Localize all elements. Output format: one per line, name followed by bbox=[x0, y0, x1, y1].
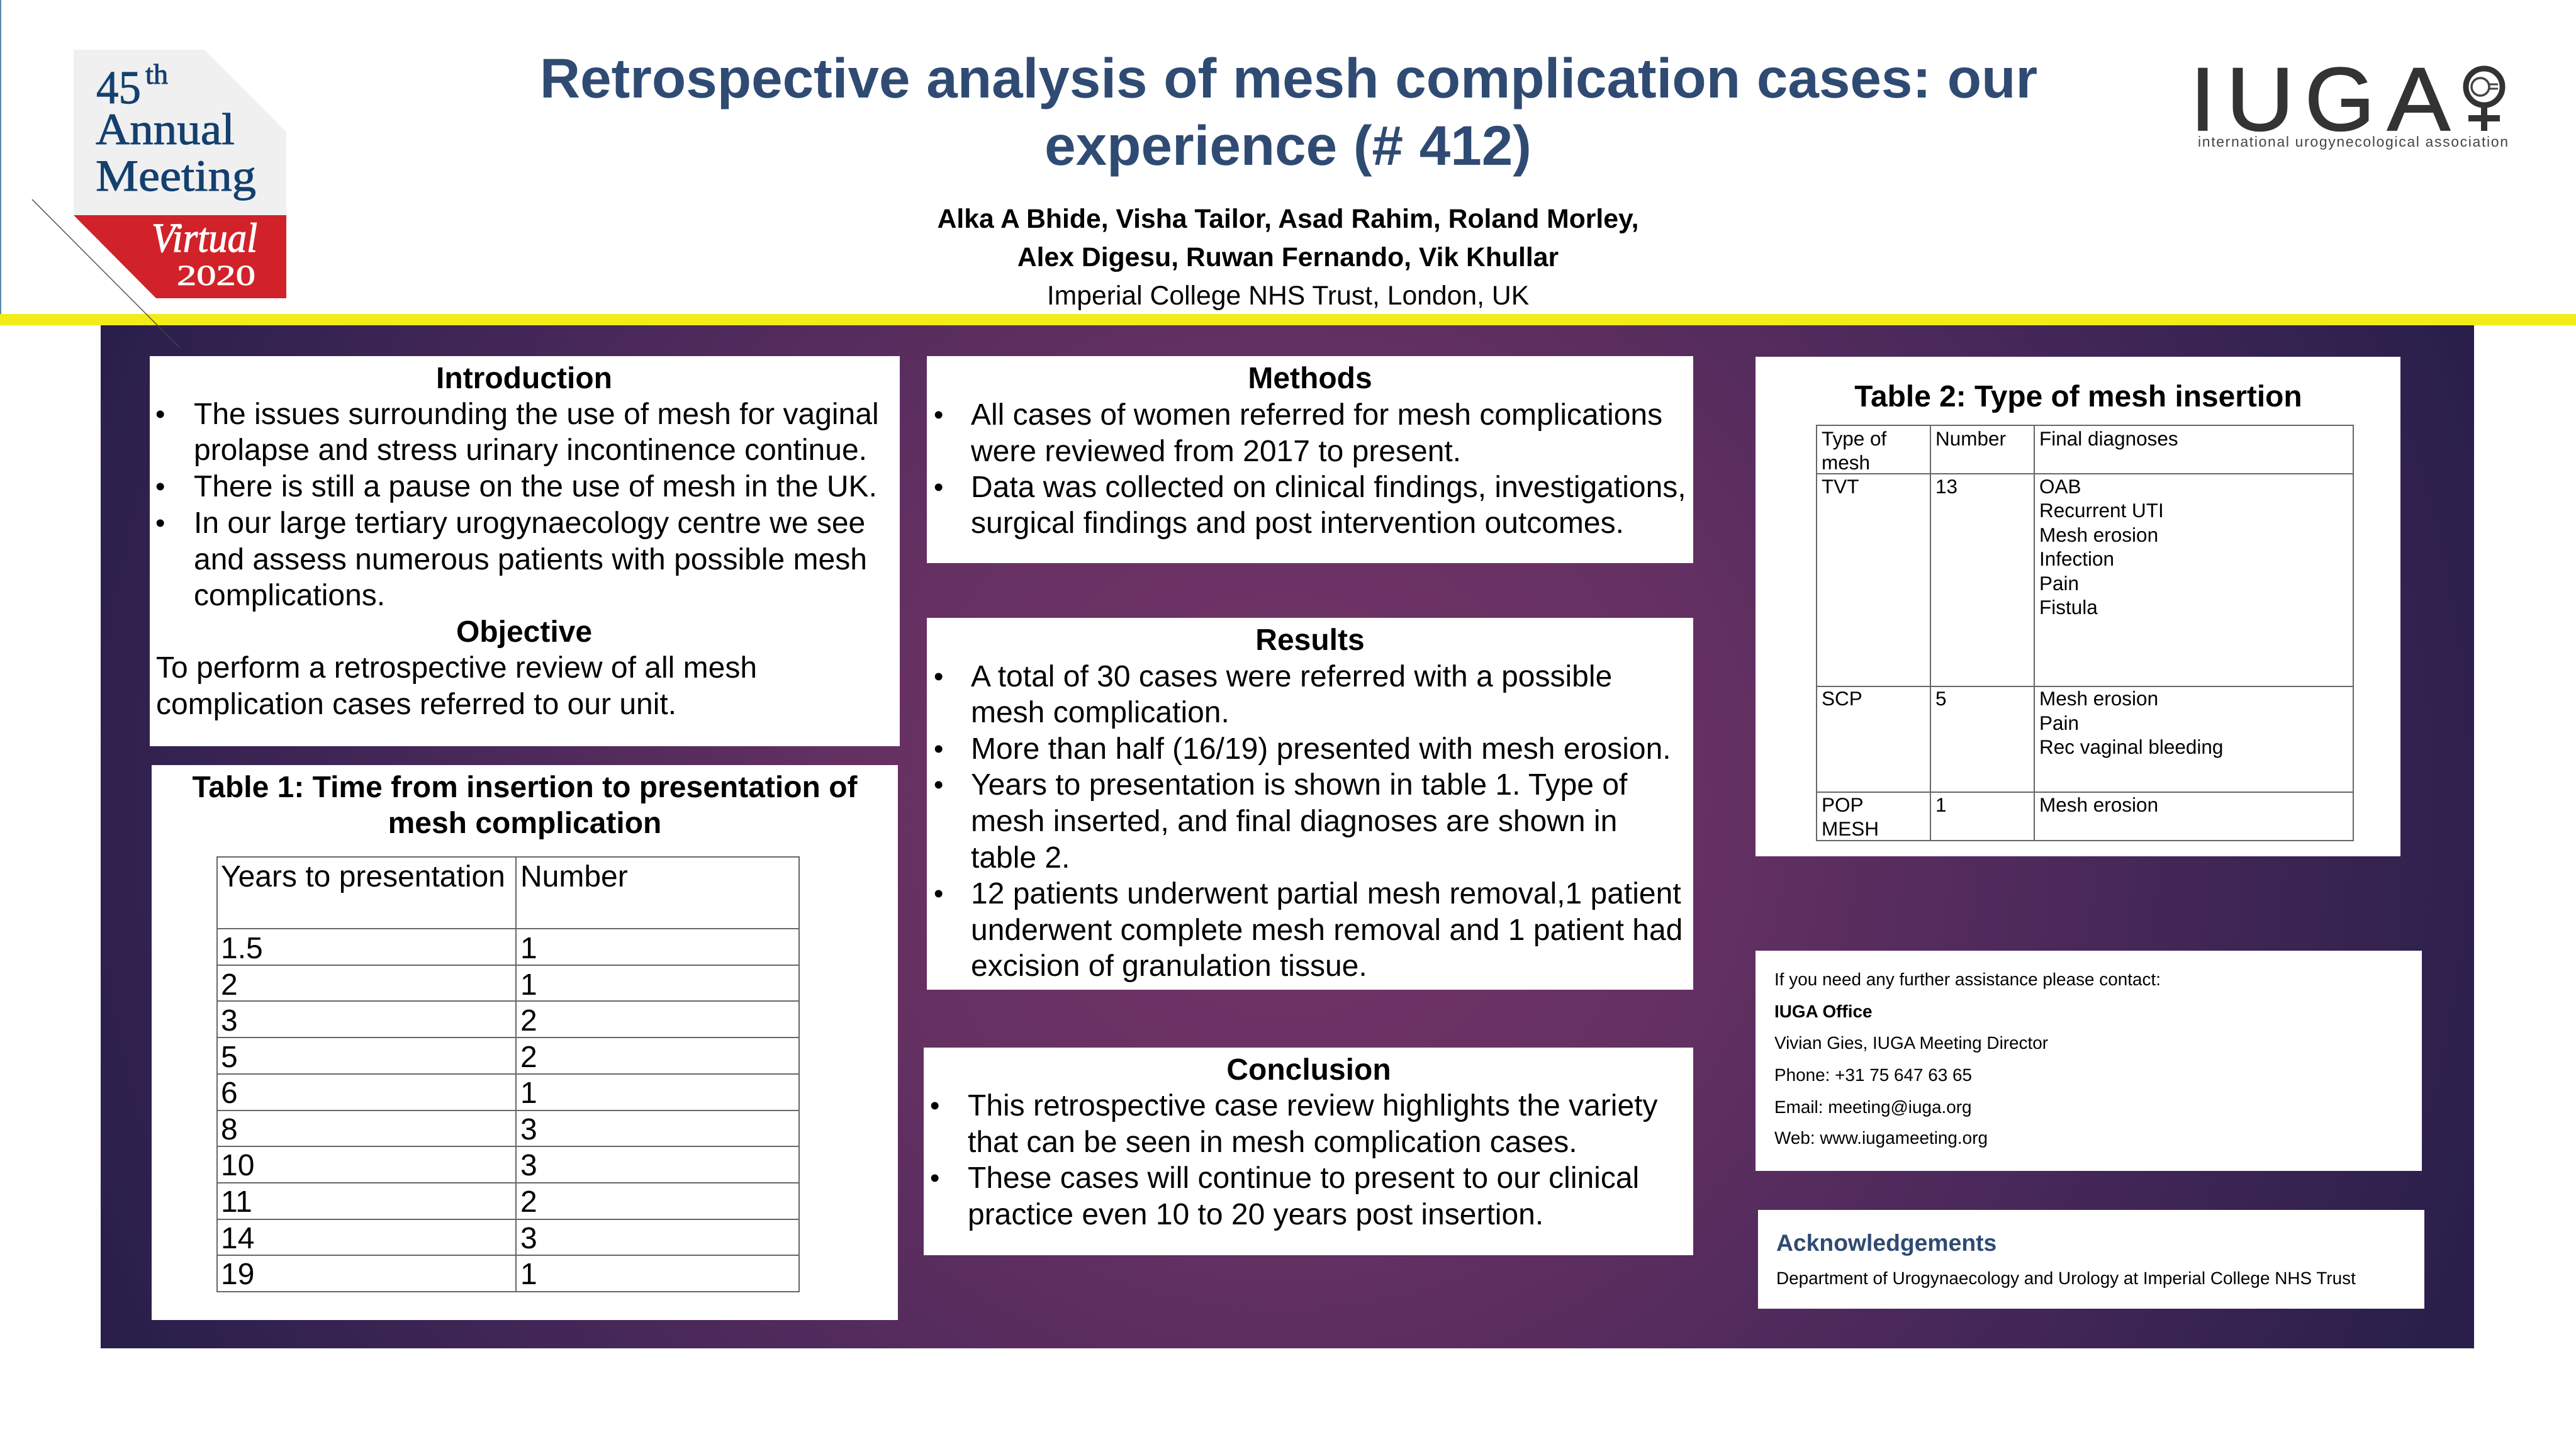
table: type of mesh insertion: Mesh erosion bbox=[2039, 793, 2158, 816]
bullet list: introduction: prolapse and stress urinary incontinence continue. bbox=[194, 434, 867, 467]
panel: contact information: IUGA Office bbox=[1774, 1002, 1872, 1021]
text: objective: To perform a retrospective review of all mesh bbox=[156, 651, 757, 685]
table: type of mesh insertion bbox=[1817, 425, 2353, 841]
IUGA logo: A bbox=[2387, 50, 2451, 150]
heading: objective: Objective bbox=[456, 615, 592, 649]
bullet list: conclusion: These cases will continue to present to our clinical bbox=[968, 1161, 1639, 1195]
bullet list: results: More than half (16/19) presented with mesh erosion. bbox=[971, 732, 1671, 766]
heading: methods: Methods bbox=[1248, 362, 1372, 395]
table: type of mesh insertion: Pain bbox=[2039, 712, 2079, 734]
IUGA logo: I bbox=[2190, 50, 2215, 150]
panel: contact information: Email: meeting@iuga.org bbox=[1774, 1097, 1972, 1117]
table: years to presentation: 1 bbox=[520, 932, 537, 965]
bullet list: conclusion: that can be seen in mesh complication cases. bbox=[968, 1126, 1577, 1159]
heading: conclusion: Conclusion bbox=[1226, 1053, 1391, 1087]
table: type of mesh insertion: TVT bbox=[1822, 475, 1859, 498]
table: years to presentation: 1.5 bbox=[221, 932, 263, 965]
table: type of mesh insertion: SCP bbox=[1822, 687, 1862, 710]
bullet list: conclusion: This retrospective case review highlights the variety bbox=[968, 1089, 1657, 1122]
panel: table 2 bbox=[1756, 357, 2400, 856]
panel: introduction and objective bbox=[150, 356, 900, 746]
table: years to presentation: 8 bbox=[221, 1113, 238, 1146]
authors and affiliation bbox=[938, 204, 1638, 311]
bullet list: conclusion bbox=[930, 1089, 1657, 1231]
table: years to presentation: Number bbox=[520, 860, 628, 893]
bullet list: introduction bbox=[155, 398, 879, 612]
bullet list: results: Years to presentation is shown in table 1. Type of bbox=[971, 768, 1628, 802]
table: type of mesh insertion: Final diagnoses bbox=[2039, 427, 2178, 450]
diagonal line bbox=[32, 199, 179, 347]
bullet list: methods: surgical findings and post intervention outcomes. bbox=[971, 506, 1624, 540]
table: years to presentation: Years to presentation bbox=[221, 860, 505, 893]
table: type of mesh insertion: Fistula bbox=[2039, 596, 2098, 618]
panel: contact information bbox=[1756, 951, 2422, 1171]
panel: conclusion bbox=[924, 1048, 1693, 1255]
logo: 45th Annual Meeting Virtual 2020: Meeting bbox=[96, 152, 256, 201]
heading: table 1: mesh complication bbox=[388, 807, 661, 840]
table: years to presentation: 1 bbox=[520, 1077, 537, 1110]
icon: female symbol with key bbox=[2466, 69, 2502, 131]
table: type of mesh insertion: Infection bbox=[2039, 547, 2114, 570]
table: years to presentation: 5 bbox=[221, 1041, 238, 1074]
bullet list: results: excision of granulation tissue. bbox=[971, 949, 1367, 983]
table: years to presentation: 2 bbox=[520, 1004, 537, 1038]
bullet list: introduction: • bbox=[155, 508, 165, 539]
table: type of mesh insertion: POP bbox=[1822, 793, 1864, 816]
table: years to presentation: 3 bbox=[520, 1113, 537, 1146]
bullet list: results: • bbox=[934, 734, 943, 764]
text: objective bbox=[156, 651, 757, 721]
table: years to presentation bbox=[217, 857, 799, 1292]
bullet list: results: underwent complete mesh removal and 1 patient had bbox=[971, 914, 1683, 947]
table: years to presentation: 6 bbox=[221, 1077, 238, 1110]
yellow header bar bbox=[0, 314, 2576, 325]
bullet list: methods: Data was collected on clinical findings, investigations, bbox=[971, 471, 1686, 504]
heading: results: Results bbox=[1255, 624, 1365, 657]
bullet list: introduction: complications. bbox=[194, 579, 385, 612]
bullet list: results: table 2. bbox=[971, 841, 1070, 875]
table: type of mesh insertion: Recurrent UTI bbox=[2039, 499, 2164, 522]
logo: 45th Annual Meeting Virtual 2020: Annual bbox=[96, 105, 235, 154]
table: years to presentation: 14 bbox=[221, 1222, 254, 1255]
bullet list: methods: All cases of women referred for mesh complications bbox=[971, 398, 1662, 432]
title: Retrospective analysis of mesh complication cases: our bbox=[540, 47, 2037, 109]
panel: table 1 bbox=[152, 765, 898, 1320]
bullet list: conclusion: • bbox=[930, 1090, 939, 1121]
IUGA logo: G bbox=[2305, 50, 2375, 150]
bullet list: results: mesh inserted, and final diagnoses are shown in bbox=[971, 805, 1617, 838]
bullet list: results: 12 patients underwent partial mesh removal,1 patient bbox=[971, 877, 1681, 910]
table: years to presentation: 19 bbox=[221, 1258, 254, 1291]
panel: results bbox=[927, 618, 1693, 990]
table: years to presentation: 3 bbox=[221, 1004, 238, 1038]
table: type of mesh insertion: 13 bbox=[1935, 475, 1957, 498]
table: type of mesh insertion: Mesh erosion bbox=[2039, 687, 2158, 710]
logo: 45th Annual Meeting Virtual 2020: 2020 bbox=[177, 259, 255, 291]
logo: 45th Annual Meeting Virtual 2020: Virtual bbox=[152, 215, 257, 261]
bullet list: introduction: There is still a pause on the use of mesh in the UK. bbox=[194, 470, 877, 503]
table: type of mesh insertion: Number bbox=[1935, 427, 2006, 450]
bullet list: methods: were reviewed from 2017 to present. bbox=[970, 435, 1461, 468]
bullet list: conclusion: practice even 10 to 20 years post insertion. bbox=[968, 1198, 1543, 1231]
table: years to presentation: 10 bbox=[221, 1149, 254, 1182]
logo: 45th Annual Meeting Virtual 2020: 45 bbox=[96, 62, 141, 114]
bullet list: results: • bbox=[934, 769, 943, 800]
panel: contact information: Vivian Gies, IUGA Meeting Director bbox=[1774, 1033, 2048, 1053]
bullet list: introduction: In our large tertiary urogynaecology centre we see bbox=[194, 506, 865, 540]
bullet list: methods bbox=[934, 398, 1686, 540]
bullet list: introduction: The issues surrounding the use of mesh for vaginal bbox=[194, 398, 879, 431]
title: experience (# 412) bbox=[1044, 114, 1532, 177]
bullet list: introduction: and assess numerous patients with possible mesh bbox=[194, 543, 867, 576]
table: type of mesh insertion: Rec vaginal bleeding bbox=[2039, 736, 2223, 758]
table: years to presentation: 1 bbox=[520, 1258, 537, 1291]
table: type of mesh insertion: 5 bbox=[1935, 687, 1947, 710]
table: type of mesh insertion: OAB bbox=[2039, 475, 2081, 498]
text: department: Department of Urogynaecology and Urology at Imperial College NHS Trust bbox=[1776, 1268, 2356, 1288]
heading: table 1: Table 1: Time from insertion to presentation of bbox=[192, 771, 858, 804]
authors and affiliation: Alka A Bhide, Visha Tailor, Asad Rahim, Roland Morley, bbox=[938, 204, 1638, 234]
panel: contact information: Phone: +31 75 647 63 65 bbox=[1774, 1065, 1972, 1085]
table: type of mesh insertion: Mesh erosion bbox=[2039, 523, 2158, 546]
bullet list: results bbox=[934, 660, 1683, 983]
table: years to presentation: 2 bbox=[520, 1185, 537, 1219]
bullet list: methods: • bbox=[934, 400, 943, 430]
text: objective: complication cases referred to our unit. bbox=[156, 688, 676, 721]
table: years to presentation: 1 bbox=[520, 968, 537, 1002]
panel: methods bbox=[927, 356, 1693, 563]
table: type of mesh insertion: mesh bbox=[1822, 451, 1870, 474]
table: years to presentation: 2 bbox=[520, 1041, 537, 1074]
left edge line bbox=[0, 0, 1, 314]
table: years to presentation: 2 bbox=[221, 968, 238, 1002]
logo: 45th Annual Meeting Virtual 2020 bbox=[74, 50, 286, 298]
IUGA logo: international urogynecological association bbox=[2198, 133, 2508, 150]
bullet list: introduction: • bbox=[155, 399, 165, 430]
background panel bbox=[101, 325, 2474, 1348]
table: type of mesh insertion: Pain bbox=[2039, 572, 2079, 595]
heading: table 2: Table 2: Type of mesh insertion bbox=[1854, 380, 2302, 413]
heading: table 1 bbox=[192, 771, 858, 840]
table: type of mesh insertion: 1 bbox=[1935, 793, 1947, 816]
panel: acknowledgements bbox=[1758, 1210, 2424, 1309]
heading: acknowledgements: Acknowledgements bbox=[1776, 1229, 1996, 1256]
IUGA logo bbox=[2190, 50, 2508, 150]
title bbox=[540, 47, 2037, 177]
bullet list: results: • bbox=[934, 661, 943, 692]
table: type of mesh insertion: Type of bbox=[1822, 427, 1887, 450]
panel: contact information: Web: www.iugameeting.org bbox=[1774, 1128, 1988, 1148]
table: type of mesh insertion: MESH bbox=[1822, 817, 1879, 840]
bullet list: results: mesh complication. bbox=[971, 696, 1229, 729]
IUGA logo: U bbox=[2226, 50, 2294, 150]
panel: contact information: If you need any further assistance please contact: bbox=[1774, 970, 2161, 989]
logo: 45th Annual Meeting Virtual 2020: th bbox=[145, 59, 168, 90]
table: years to presentation: 3 bbox=[520, 1222, 537, 1255]
heading: introduction: Introduction bbox=[436, 362, 612, 395]
table: years to presentation: 11 bbox=[221, 1185, 252, 1219]
bullet list: methods: • bbox=[934, 472, 943, 503]
authors and affiliation: Alex Digesu, Ruwan Fernando, Vik Khullar bbox=[1017, 242, 1559, 272]
authors and affiliation: Imperial College NHS Trust, London, UK bbox=[1047, 281, 1529, 311]
bullet list: results: A total of 30 cases were referred with a possible bbox=[971, 660, 1612, 693]
bullet list: results: • bbox=[934, 878, 943, 909]
table: years to presentation: 3 bbox=[520, 1149, 537, 1182]
bullet list: conclusion: • bbox=[930, 1163, 939, 1194]
bullet list: introduction: • bbox=[155, 471, 165, 502]
